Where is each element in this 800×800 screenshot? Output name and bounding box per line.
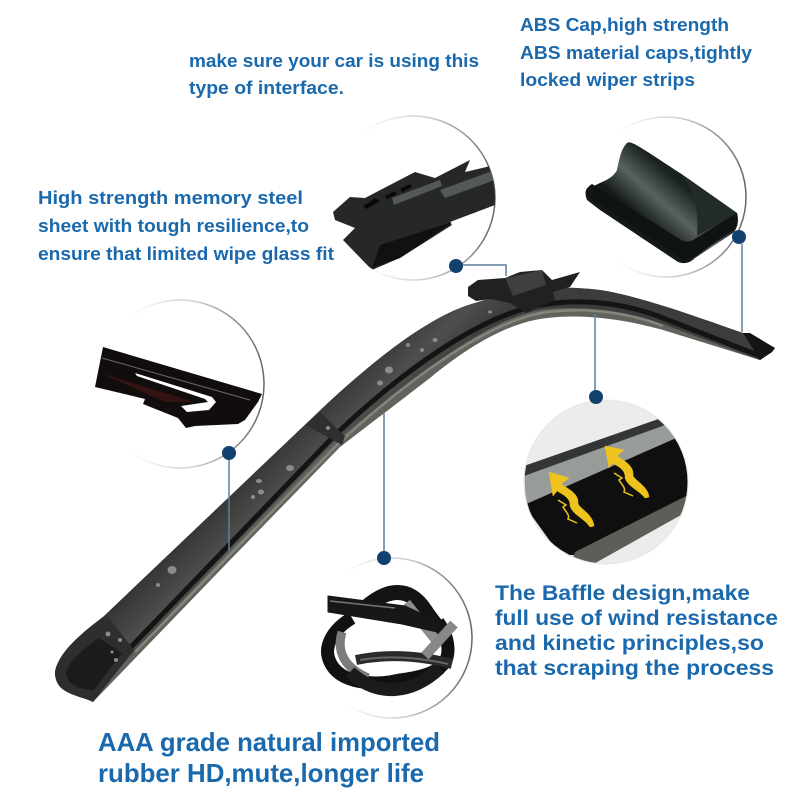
text: memory steel: ensure that limited wipe glass fit [38,244,334,264]
text: interface note [189,51,479,98]
text: baffle design [495,582,778,680]
text: ABS cap: ABS material caps,tightly [520,43,752,63]
text: ABS cap: ABS Cap,high strength [520,15,729,35]
callout: baffle detail [520,314,695,566]
cap photo [586,142,738,263]
ring [96,300,264,468]
dot [449,259,463,273]
callout: rubber knot detail [312,412,472,718]
text: memory steel: High strength memory steel [38,188,303,208]
rubber knot photo [328,592,454,690]
leader line [594,314,596,390]
blade connector [468,270,580,313]
text: baffle design: that scraping the process [495,657,774,680]
text: memory steel [38,188,334,264]
text: baffle design: and kinetic principles,so [495,632,764,655]
text: interface note: make sure your car is using this [189,51,479,71]
icon: yellow wind arrows [549,446,649,527]
blade end cap [55,617,134,702]
ring [586,117,746,277]
text: rubber grade: rubber HD,mute,longer life [98,758,424,788]
dot [589,390,603,404]
leader line [383,412,385,551]
dot [222,446,236,460]
blade tail end [743,333,775,360]
dot [377,551,391,565]
connector photo [333,160,495,270]
text: rubber grade: AAA grade natural imported [98,727,440,757]
text: ABS cap [520,15,752,90]
wiper blade [55,270,775,702]
leader line [463,265,506,276]
leader line [741,244,743,332]
ring [331,116,495,280]
text: ABS cap: locked wiper strips [520,70,695,90]
blade mid clip [306,412,345,445]
callout: steel sheet detail [95,300,264,551]
callout: ABS cap detail [586,117,746,332]
ring [524,400,688,564]
steel sheet photo [95,347,262,428]
baffle photo [524,400,688,564]
leader line [228,460,230,551]
text: baffle design: full use of wind resistance [495,607,778,630]
text: interface note: type of interface. [189,78,344,98]
text: baffle design: The Baffle design,make [495,582,750,605]
text: memory steel: sheet with tough resilience,to [38,216,309,236]
water drops [106,310,492,662]
callout: connector detail [331,116,506,280]
text: rubber grade [98,727,440,788]
ring [312,558,472,718]
dot [732,230,746,244]
